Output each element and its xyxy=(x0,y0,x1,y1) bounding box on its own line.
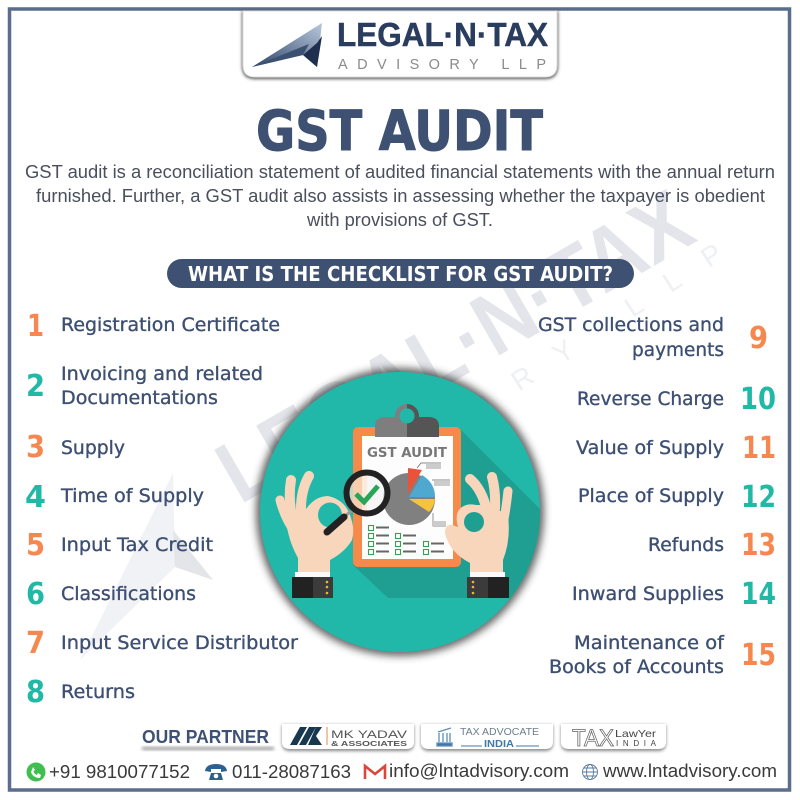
magnifier xyxy=(327,472,388,532)
partner: Tax Lawyer India xyxy=(561,724,666,752)
item 11: Value of Supply xyxy=(576,437,724,459)
item 9: payments xyxy=(632,339,724,361)
item 3: 3 xyxy=(26,430,45,465)
item 5: Input Tax Credit xyxy=(61,534,213,556)
item 12: Place of Supply xyxy=(578,485,724,507)
item 6 xyxy=(26,577,196,612)
item 7: Input Service Distributor xyxy=(61,632,298,654)
logo plate xyxy=(242,11,558,79)
right cuff xyxy=(467,572,509,598)
left checklist xyxy=(25,309,298,710)
item 2: Documentations xyxy=(61,387,218,409)
title: GST AUDIT xyxy=(256,99,543,163)
item 2: Invoicing and related xyxy=(61,363,263,385)
watermark xyxy=(80,171,728,660)
contact: landline: 011-28087163 xyxy=(232,762,351,782)
icon: logo arrow xyxy=(252,23,322,67)
item 9: 9 xyxy=(749,321,768,356)
item 8: 8 xyxy=(26,675,45,710)
intro paragraph: with provisions of GST. xyxy=(306,210,493,230)
item 7 xyxy=(26,626,298,661)
pie chart xyxy=(383,463,450,526)
item 8: Returns xyxy=(61,681,135,703)
right hand xyxy=(445,477,509,572)
partner: Tax Advocate India xyxy=(421,724,553,751)
item 2: 2 xyxy=(26,369,45,404)
item 11 xyxy=(576,431,776,466)
item 6: Classifications xyxy=(61,583,196,605)
contact: phone: +91 9810077152 xyxy=(49,762,190,782)
item 4: Time of Supply xyxy=(60,485,204,507)
partner: Tax Advocate India: TAX ADVOCATE xyxy=(460,727,539,738)
item 9 xyxy=(538,314,768,361)
item 15: Books of Accounts xyxy=(549,656,724,678)
left cuff xyxy=(292,572,333,598)
logo subtitle: ADVISORY LLP xyxy=(338,57,546,73)
item 10: 10 xyxy=(740,382,776,417)
partner: MK Yadav: MK YADAV xyxy=(331,729,408,741)
item 15: 15 xyxy=(741,638,776,673)
intro paragraph: furnished. Further, a GST audit also assists in assessing whether the taxpayer is obedient xyxy=(36,186,765,206)
item 15: Maintenance of xyxy=(574,632,725,654)
item 10: Reverse Charge xyxy=(577,388,724,410)
watermark: ADVISORY LLP xyxy=(266,237,728,552)
contact: email: info@lntadvisory.com xyxy=(389,761,569,781)
intro paragraph: GST audit is a reconciliation statement of audited financial statements with the annual return xyxy=(25,162,775,182)
item 4 xyxy=(25,480,204,515)
item 14: 14 xyxy=(741,577,776,612)
left hand xyxy=(280,476,353,572)
sample check rows xyxy=(368,526,444,554)
partner: MK Yadav: & ASSOCIATES xyxy=(331,741,407,748)
item 13: Refunds xyxy=(648,534,724,556)
contact: website: www.lntadvisory.com xyxy=(602,761,777,781)
item 13: 13 xyxy=(741,528,776,563)
right checklist xyxy=(538,314,776,678)
partner: Tax Lawyer India: LawYer xyxy=(615,728,657,740)
item 15 xyxy=(549,632,776,678)
item 5: 5 xyxy=(26,528,45,563)
item 3: Supply xyxy=(61,437,125,459)
item 14: Inward Supplies xyxy=(572,583,724,605)
item 10 xyxy=(577,382,776,417)
item 8 xyxy=(26,675,135,710)
partner: Tax Lawyer India: TAX xyxy=(572,725,614,752)
item 3 xyxy=(26,430,125,465)
item 2 xyxy=(26,363,263,409)
item 13 xyxy=(648,528,776,563)
intro paragraph xyxy=(25,162,775,230)
item 11: 11 xyxy=(742,431,776,466)
partner: MK Yadav xyxy=(282,724,414,751)
item 1 xyxy=(27,309,280,344)
watermark: LEGAL·N·TAX xyxy=(200,171,708,521)
item 4: 4 xyxy=(25,480,46,515)
item 5 xyxy=(26,528,213,563)
clipboard xyxy=(353,404,461,567)
logo name: LEGAL·N·TAX xyxy=(337,16,548,53)
item 1: 1 xyxy=(27,309,44,344)
item 12: 12 xyxy=(741,480,776,515)
item 9: GST collections and xyxy=(538,314,724,336)
clipboard: GST AUDIT xyxy=(367,446,447,461)
partner: Tax Lawyer India: INDIA xyxy=(616,739,657,748)
item 7: 7 xyxy=(26,626,45,661)
partner: Tax Advocate India: INDIA xyxy=(484,739,514,750)
item 12 xyxy=(578,480,776,515)
item 6: 6 xyxy=(26,577,45,612)
item 1: Registration Certificate xyxy=(61,314,280,336)
central illustration xyxy=(256,368,545,656)
item 14 xyxy=(572,577,776,612)
checklist heading pill: WHAT IS THE CHECKLIST FOR GST AUDIT? xyxy=(188,262,613,286)
partner label: OUR PARTNER xyxy=(142,727,269,747)
